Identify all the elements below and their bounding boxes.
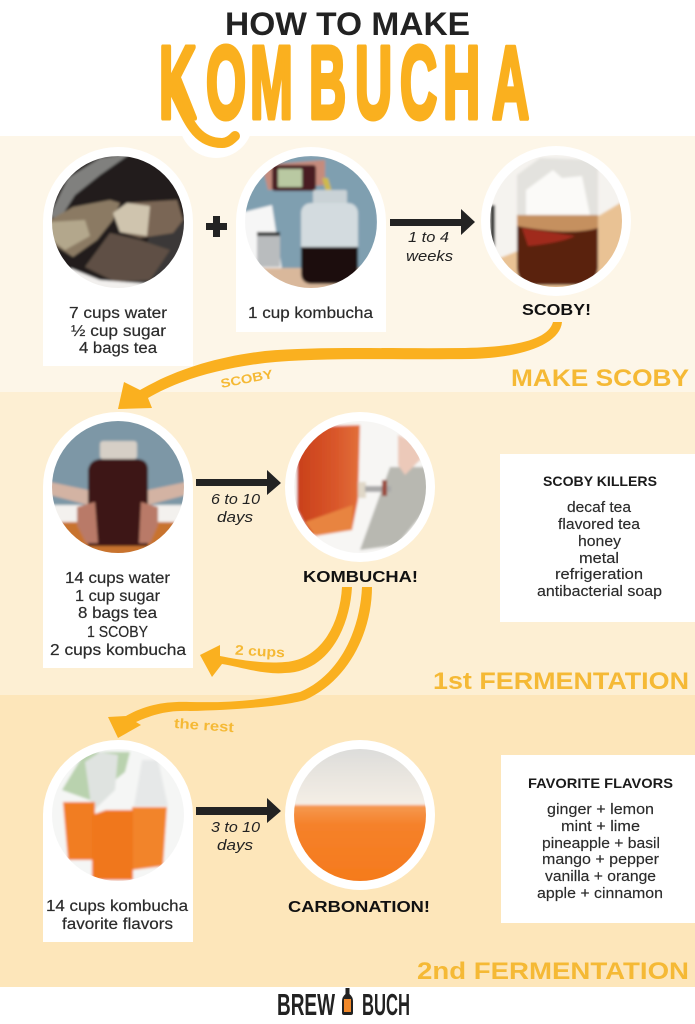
list: scoby killers xyxy=(537,500,662,600)
list: favorite flavors xyxy=(537,802,663,902)
ingredient text xyxy=(46,898,188,933)
icon: bottle xyxy=(342,988,353,1015)
arrow: 1 to 4 weeks xyxy=(390,209,475,265)
ingredient text: 4 bags tea xyxy=(79,340,157,357)
heading: how to make: HOW TO MAKE xyxy=(225,6,470,42)
photo: flip-top bottles xyxy=(50,747,186,883)
duration label: weeks xyxy=(406,249,453,265)
ingredient text: 14 cups kombucha xyxy=(46,898,188,915)
list: favorite flavors: vanilla + orange xyxy=(545,869,656,885)
title backing circle xyxy=(179,84,253,158)
result: carbonation xyxy=(285,740,435,916)
result: kombucha xyxy=(285,412,435,586)
panel: favorite flavors xyxy=(501,755,695,923)
arrow: scoby to first fermentation xyxy=(118,322,562,409)
duration label xyxy=(211,820,260,854)
card: tea ingredients xyxy=(43,147,193,366)
list: scoby killers: metal xyxy=(579,551,619,567)
ingredient text: 14 cups water xyxy=(65,570,170,587)
photo: jar with tap xyxy=(292,419,428,555)
photo: pouring kombucha into jar xyxy=(244,155,378,290)
ingredient text xyxy=(69,305,167,357)
ingredient text: 1 SCOBY xyxy=(87,624,148,641)
ingredient text: 2 cups kombucha xyxy=(50,642,186,659)
result label: KOMBUCHA! xyxy=(303,569,418,586)
photo: holding jar xyxy=(50,419,186,556)
section label: 1st fermentation: 1st FERMENTATION xyxy=(433,668,689,695)
list: favorite flavors: pineapple + basil xyxy=(542,836,660,852)
icon: plus xyxy=(206,216,227,237)
list: favorite flavors: mango + pepper xyxy=(542,852,659,868)
arrow: 3 to 10 days xyxy=(196,798,281,854)
panel: make scoby background xyxy=(0,136,695,392)
panel: 1st fermentation background xyxy=(0,392,695,695)
ingredient text: 8 bags tea xyxy=(78,605,157,622)
list: scoby killers: flavored tea xyxy=(558,517,641,533)
title xyxy=(159,6,529,158)
card: second fermentation ingredients xyxy=(43,740,193,942)
heading: favorite flavors: FAVORITE FLAVORS xyxy=(528,775,673,791)
list: scoby killers: antibacterial soap xyxy=(537,584,662,600)
duration label: 6 to 10 xyxy=(211,492,260,508)
arrow label: scoby: SCOBY xyxy=(219,367,275,391)
duration label: 1 to 4 xyxy=(408,230,449,246)
duration label: days xyxy=(217,838,253,854)
duration label: 3 to 10 xyxy=(211,820,260,836)
ingredient text xyxy=(50,570,186,659)
logo: brew buch: BREW xyxy=(277,987,335,1022)
ingredient text: 1 cup sugar xyxy=(75,588,160,605)
heading: kombucha: KOMBUCHA xyxy=(159,26,529,141)
photo: tea bags xyxy=(50,154,190,292)
photo: scoby jar xyxy=(488,153,625,290)
result label: SCOBY! xyxy=(522,302,591,319)
arrow label: the rest: the rest xyxy=(174,715,235,735)
logo: brew buch: BUCH xyxy=(362,987,410,1022)
list: scoby killers: decaf tea xyxy=(567,500,632,516)
photo: carbonated bubbles xyxy=(292,747,428,883)
arrow: 6 to 10 days xyxy=(196,470,281,526)
card: kombucha starter xyxy=(236,147,386,332)
arrow: the rest to second fermentation xyxy=(108,587,372,738)
result: scoby xyxy=(481,146,631,319)
heading: scoby killers: SCOBY KILLERS xyxy=(543,473,657,489)
ingredient text: ½ cup sugar xyxy=(71,323,166,340)
list: scoby killers: honey xyxy=(578,534,622,550)
ingredient text: 7 cups water xyxy=(69,305,167,322)
section label: make scoby: MAKE SCOBY xyxy=(511,365,689,392)
ingredient text: 1 cup kombucha xyxy=(248,305,373,322)
panel: 2nd fermentation background xyxy=(0,695,695,987)
arrow label: 2 cups: 2 cups xyxy=(235,642,286,660)
panel: scoby killers xyxy=(500,454,695,622)
list: favorite flavors: ginger + lemon xyxy=(547,802,654,818)
list: scoby killers: refrigeration xyxy=(555,567,643,583)
duration label xyxy=(211,492,260,526)
result label: CARBONATION! xyxy=(288,899,430,916)
section label: 2nd fermentation: 2nd FERMENTATION xyxy=(417,958,689,985)
list: favorite flavors: apple + cinnamon xyxy=(537,886,663,902)
duration label xyxy=(406,230,453,265)
list: favorite flavors: mint + lime xyxy=(561,819,640,835)
ingredient text: favorite flavors xyxy=(62,916,173,933)
duration label: days xyxy=(217,510,253,526)
arrow: 2 cups back to first fermentation xyxy=(200,587,352,677)
card: first fermentation ingredients xyxy=(43,412,193,668)
